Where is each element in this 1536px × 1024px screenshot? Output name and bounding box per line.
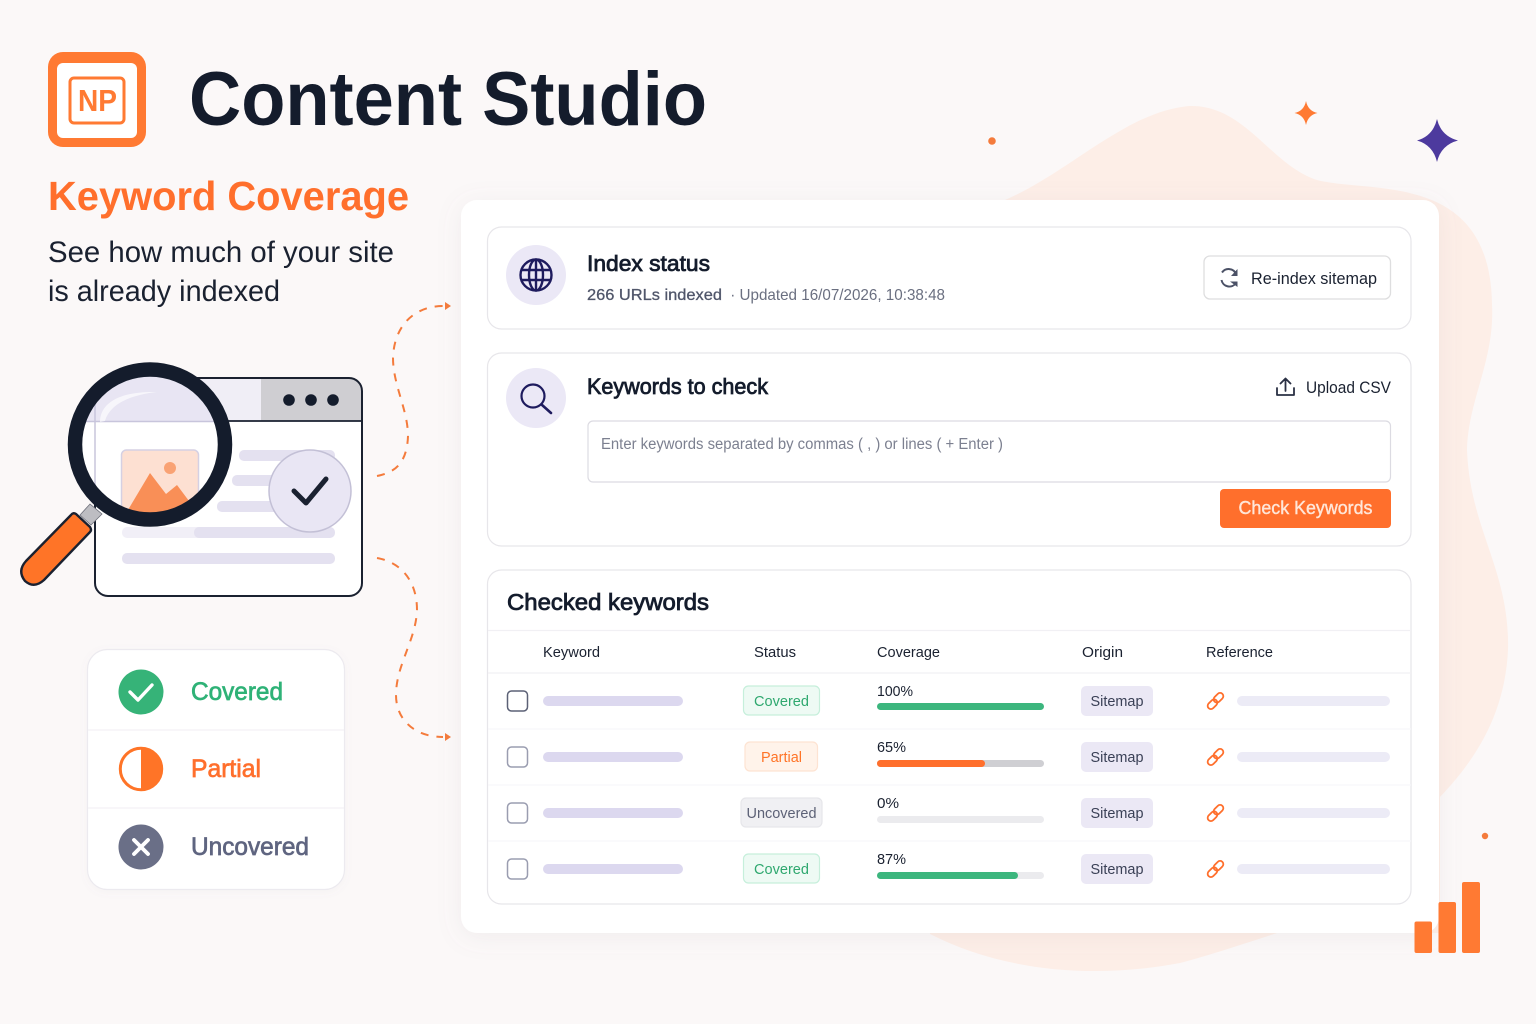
row 4: Covered (754, 861, 809, 878)
logo (48, 52, 146, 147)
row 2: 65% (877, 739, 906, 756)
icon: orange bar chart (1414, 882, 1480, 953)
subtitle: Keyword Coverage (48, 173, 409, 219)
row 3: Sitemap (1090, 805, 1144, 822)
row 1: 100% (877, 683, 913, 700)
row 1: Sitemap (1090, 693, 1144, 710)
table header: Reference (1206, 644, 1273, 661)
logo: NP (78, 83, 117, 118)
magnifying lens (70, 370, 230, 530)
row 2 (508, 739, 1390, 772)
keyword input (588, 421, 1390, 482)
button: check keywords (1220, 489, 1391, 528)
row 3: 0% (877, 795, 899, 812)
upload csv (1277, 378, 1391, 397)
legend: covered (118, 670, 283, 714)
table header: Keyword (543, 644, 600, 661)
icon: small orange dot (988, 137, 996, 145)
illustration: browser with magnifying glass (21, 370, 362, 596)
row 1 (508, 683, 1390, 716)
heading: index status: Index status (587, 251, 710, 276)
description text: is already indexed (48, 275, 280, 308)
table header: Status (754, 644, 796, 661)
arrow: bottom dashed connector (377, 558, 451, 741)
icon: search (506, 368, 566, 428)
row 2: Partial (761, 749, 802, 766)
panel: main card (461, 200, 1439, 933)
row 2: Sitemap (1090, 749, 1144, 766)
panel: index status (488, 227, 1411, 329)
arrow: top dashed connector (377, 302, 451, 476)
row 3 (508, 795, 1390, 828)
row 4 (508, 851, 1390, 884)
legend: uncovered (118, 824, 309, 870)
legend: covered: Covered (191, 678, 283, 706)
index status details: 266 URLs indexed (587, 287, 722, 304)
icon: purple sparkle (1417, 119, 1458, 162)
row 3: Uncovered (746, 805, 816, 822)
icon: globe (506, 245, 566, 305)
icon: orange sparkle (1294, 101, 1318, 125)
title: Content Studio (189, 57, 707, 142)
panel: status legend (88, 650, 344, 890)
button: re-index sitemap: Re-index sitemap (1251, 270, 1377, 288)
magnifying handle (21, 504, 102, 585)
index status details: · Updated 16/07/2026, 10:38:48 (726, 287, 945, 304)
check circle (269, 450, 351, 532)
button: re-index sitemap (1204, 256, 1390, 299)
browser window (95, 378, 362, 596)
keyword input: Enter keywords separated by commas ( , ) or lines ( + Enter ) (601, 436, 1003, 453)
row 4: 87% (877, 851, 906, 868)
icon: small dot right (1482, 833, 1488, 839)
decorative background blob (930, 106, 1508, 971)
legend: partial: Partial (191, 755, 261, 783)
upload csv: Upload CSV (1306, 379, 1391, 397)
content lines (122, 450, 335, 564)
table header: Origin (1082, 644, 1123, 661)
heading: checked keywords: Checked keywords (507, 589, 709, 615)
row 1: Covered (754, 693, 809, 710)
table header (543, 644, 1273, 661)
description text: See how much of your site (48, 236, 394, 269)
button: check keywords: Check Keywords (1238, 498, 1372, 518)
legend: partial (120, 748, 261, 790)
heading: keywords to check: Keywords to check (587, 374, 769, 399)
row 4: Sitemap (1090, 861, 1144, 878)
panel: keywords to check (488, 353, 1411, 546)
table header: Coverage (877, 644, 940, 661)
legend: uncovered: Uncovered (191, 833, 309, 861)
description text (48, 236, 394, 308)
panel: checked keywords table (488, 570, 1411, 904)
